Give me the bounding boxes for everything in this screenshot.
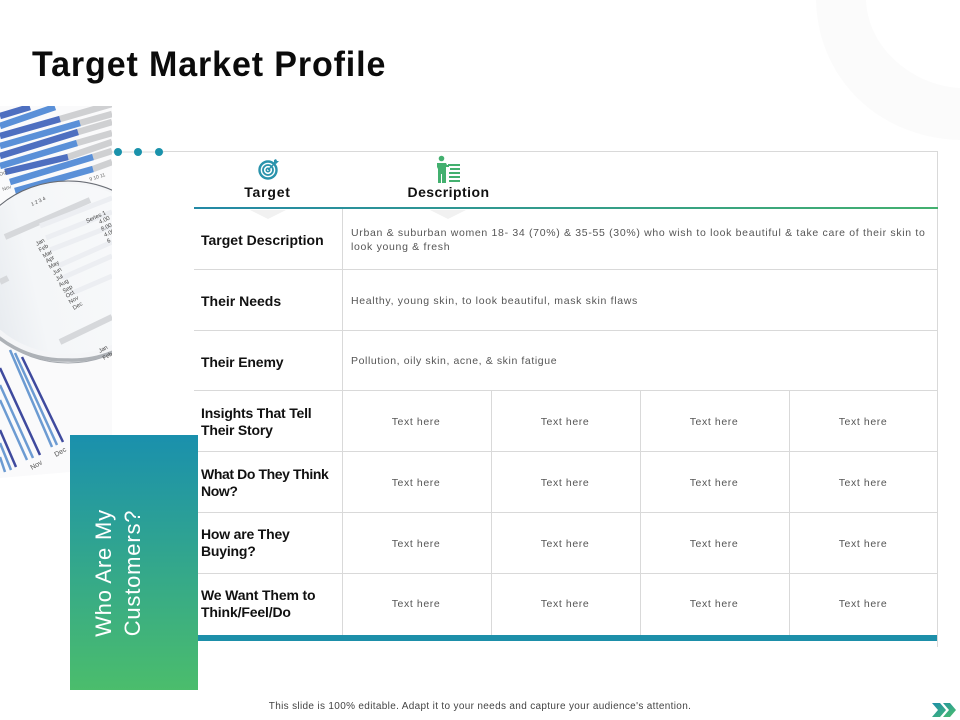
row label: Think now: Now? [201, 483, 238, 499]
cells row 3: Text here [690, 538, 738, 550]
photo: magnifying glass over charts: 1 2 3 4 [30, 196, 47, 208]
cells row 1: Text here [541, 416, 589, 428]
cells row 2: Text here [690, 477, 738, 489]
row text: Target Description [351, 227, 926, 253]
photo: magnifying glass over charts: Jan [35, 238, 46, 248]
table frame [163, 151, 938, 152]
row label: Insights: Insights That Tell [201, 405, 311, 421]
icon: target [258, 159, 279, 180]
title: Target Market Profile [32, 45, 386, 84]
photo: magnifying glass over charts: Jun [52, 267, 63, 277]
photo: magnifying glass over charts: Nov [30, 459, 44, 472]
photo: magnifying glass over charts: 6 [106, 238, 112, 245]
photo: magnifying glass over charts: 9 10 11 [89, 172, 106, 183]
photo: magnifying glass over charts: Jul [55, 274, 64, 283]
photo: magnifying glass over charts [0, 106, 112, 472]
heading: Target: Target [244, 184, 291, 200]
cells row 1: Text here [690, 416, 738, 428]
photo: magnifying glass over charts: Dec [54, 446, 68, 459]
cells row 1: Text here [392, 416, 440, 428]
row label: Want [201, 587, 315, 620]
connector dots [112, 148, 164, 156]
photo: magnifying glass over charts: May [48, 260, 61, 271]
cells row 1: Text here [839, 416, 887, 428]
bottom chart lines [0, 350, 63, 472]
photo: magnifying glass over charts: Nov [68, 295, 80, 306]
cells row 4: Text here [541, 598, 589, 610]
photo: magnifying glass over charts: Aug [58, 278, 70, 289]
photo: magnifying glass over charts: Jan [98, 345, 109, 355]
cells row 4 [392, 598, 887, 610]
footer note: This slide is 100% editable. Adapt it to your needs and capture your audience's attention. [269, 701, 691, 712]
cells row 3 [392, 538, 887, 550]
table bottom bar [194, 635, 937, 641]
side banner [70, 435, 198, 690]
banner text: Who Are My [91, 509, 116, 637]
cells row 3: Text here [839, 538, 887, 550]
photo: magnifying glass over charts: Sep [62, 284, 74, 295]
heading: Description: Description [408, 184, 489, 200]
photo: magnifying glass over charts: Apr [45, 255, 56, 265]
row label: Want: We Want Them to [201, 587, 315, 603]
lens [0, 187, 168, 363]
header rule [194, 207, 938, 209]
photo: magnifying glass over charts: Feb [38, 244, 50, 254]
icon: next chevrons [932, 703, 956, 717]
cells row 1 [392, 416, 887, 428]
cells row 2: Text here [541, 477, 589, 489]
cells row 3: Text here [392, 538, 440, 550]
cells row 4: Text here [839, 598, 887, 610]
icon: person presenting list [437, 156, 460, 183]
row label: Their Needs: Their Needs [201, 293, 281, 309]
photo: magnifying glass over charts: Dec [72, 301, 84, 312]
photo: magnifying glass over charts: Nov [2, 184, 13, 193]
row label: Think now [201, 466, 329, 499]
row label: Insights: Their Story [201, 422, 273, 438]
row lines [194, 269, 938, 270]
row text: Target Description: look young & fresh [351, 241, 450, 253]
photo: magnifying glass over charts: Oct [65, 290, 76, 300]
cells row 4: Text here [690, 598, 738, 610]
banner text: Customers? [120, 510, 145, 636]
row text: Target Description: Urban & suburban women 18- 34 (70%) & 35-55 (30%) who wish to look beautiful & take care of their skin to [351, 227, 926, 239]
row label: Their Enemy: Their Enemy [201, 354, 283, 370]
background arc decoration [810, 0, 960, 145]
cells row 2: Text here [839, 477, 887, 489]
banner text [91, 509, 145, 637]
row label: Insights [201, 405, 311, 438]
cells row 4: Text here [392, 598, 440, 610]
row label: Buying [201, 526, 290, 559]
row label: Think now: What Do They Think [201, 466, 328, 482]
cells row 3: Text here [541, 538, 589, 550]
row text: Their Enemy: Pollution, oily skin, acne, & skin fatigue [351, 355, 557, 367]
cells row 2: Text here [392, 477, 440, 489]
row label: Target Description: Target Description [201, 232, 324, 248]
photo: magnifying glass over charts: Series 1 [85, 210, 107, 225]
row label: Want: Think/Feel/Do [201, 604, 291, 620]
row text: Their Needs: Healthy, young skin, to look beautiful, mask skin flaws [351, 295, 638, 307]
row label: Buying: How are They [201, 526, 290, 542]
photo: magnifying glass over charts: 4.00 [98, 216, 111, 226]
cells row 2 [392, 477, 887, 489]
header notches [250, 210, 466, 219]
photo: magnifying glass over charts: Mar [42, 250, 54, 260]
row label: Buying: Buying? [201, 543, 256, 559]
